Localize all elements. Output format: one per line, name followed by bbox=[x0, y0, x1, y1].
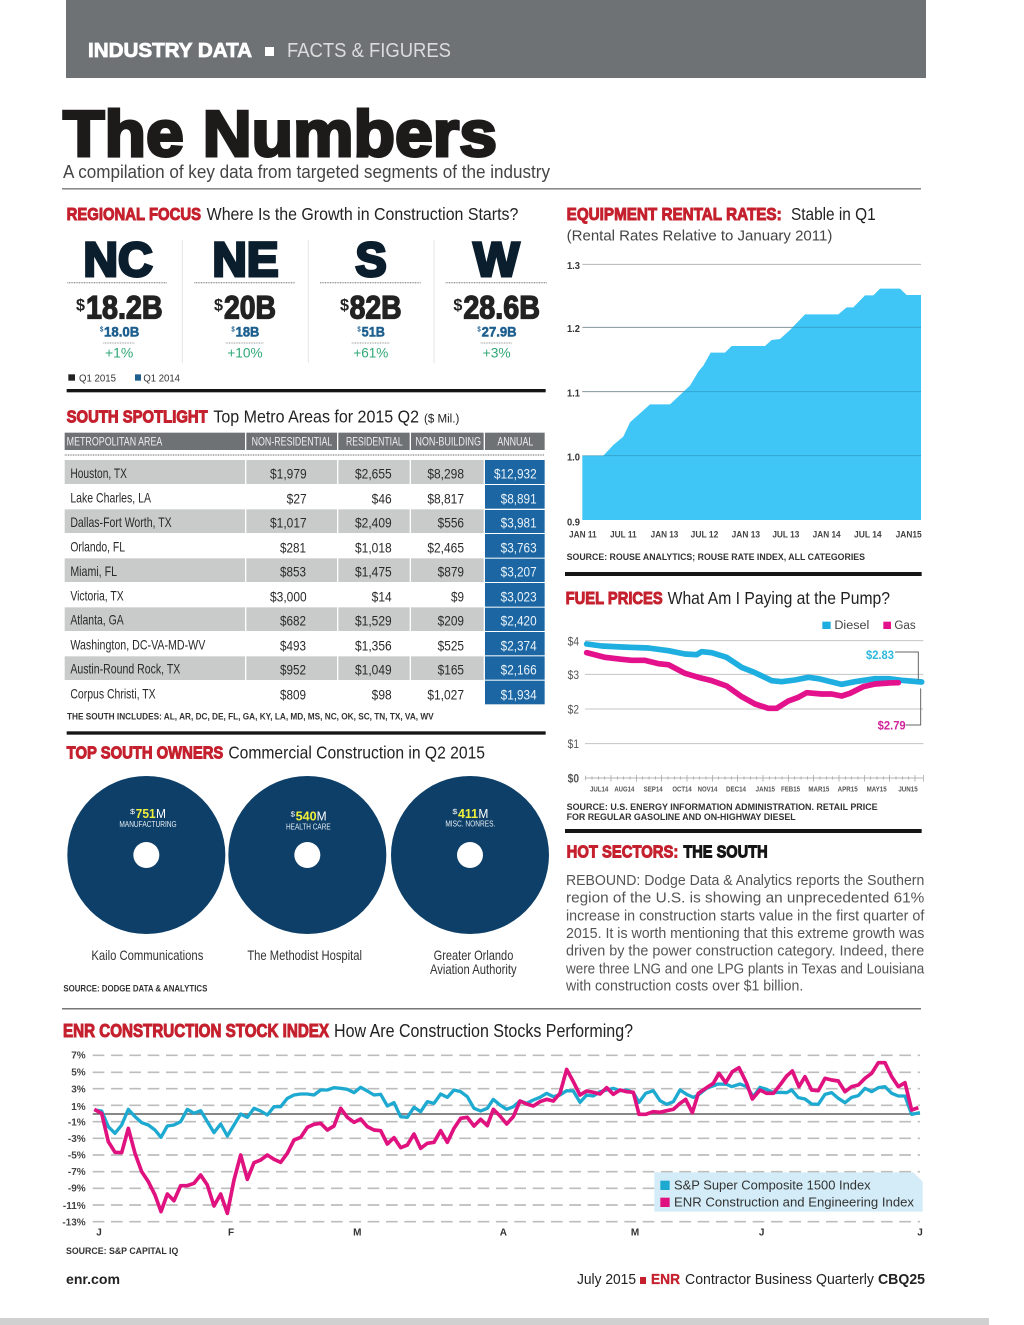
table row: Austin bbox=[70, 661, 537, 678]
area chart: rental rates: JAN 14 bbox=[813, 529, 841, 539]
line chart: stock index: M bbox=[353, 1228, 361, 1239]
heading: equipment rental rates: EQUIPMENT RENTAL RATES: bbox=[567, 204, 782, 224]
table row: Corpus Christi: $98 bbox=[372, 686, 392, 702]
region S: +61% bbox=[353, 345, 388, 361]
line chart: fuel prices: $3 bbox=[568, 668, 579, 682]
area chart: rental rates: 1.0 bbox=[567, 453, 580, 464]
line chart: fuel prices: JUN15 bbox=[898, 784, 918, 793]
body text: 2015. It is worth mentioning that this extreme growth was bbox=[566, 926, 924, 942]
region NE bbox=[194, 233, 295, 361]
disc: Kailo Communications: 751 bbox=[136, 806, 156, 821]
table row: Houston: Houston, TX bbox=[70, 465, 127, 481]
table row: Washington: Washington, DC-VA-MD-WV bbox=[70, 636, 206, 652]
heading: regional focus: REGIONAL FOCUS bbox=[67, 204, 201, 224]
table row: Victoria: $3,023 bbox=[501, 588, 537, 604]
table row: Dallas bbox=[70, 514, 537, 531]
region W: 28.6B bbox=[463, 289, 540, 325]
heading: south spotlight: ($ Mil.) bbox=[424, 412, 459, 426]
callout: gas price bbox=[878, 688, 921, 732]
line chart: fuel prices: $1 bbox=[568, 737, 579, 751]
body text bbox=[565, 873, 925, 995]
heading: equipment rental rates: (Rental Rates Relative to January 2011) bbox=[567, 228, 832, 245]
legend: quarters: Q1 2015 bbox=[79, 373, 116, 384]
heading: south spotlight bbox=[67, 407, 459, 427]
header band bbox=[66, 0, 926, 78]
line chart: fuel prices: AUG14 bbox=[614, 784, 635, 793]
body text: REBOUND: Dodge Data & Analytics reports the Southern bbox=[566, 873, 924, 889]
region NC: +1% bbox=[105, 345, 133, 361]
body text: increase in construction starts value in the first quarter of bbox=[566, 908, 925, 924]
heading: equipment rental rates bbox=[567, 204, 876, 245]
region NE: $ bbox=[214, 296, 224, 315]
heading: hot sectors bbox=[567, 842, 768, 862]
table row: Dallas: $2,409 bbox=[355, 515, 392, 531]
region NE: +10% bbox=[227, 345, 263, 361]
table row: Houston bbox=[70, 465, 537, 482]
table row: Washington: $525 bbox=[438, 637, 464, 653]
disc: The Methodist Hospital: 540 bbox=[296, 809, 317, 824]
disc: Kailo Communications: M bbox=[156, 806, 166, 821]
region W: 27.9B bbox=[482, 324, 517, 340]
body text: with construction costs over $1 billion. bbox=[565, 979, 803, 995]
table row: Dallas: Dallas-Fort Worth, TX bbox=[70, 514, 172, 530]
heading: top south owners: Commercial Construction in Q2 2015 bbox=[228, 742, 485, 762]
legend: fuel: Diesel bbox=[834, 618, 869, 632]
table row: Miami bbox=[70, 563, 537, 580]
table header: NON-BUILDING bbox=[415, 435, 481, 449]
region S: $ bbox=[357, 325, 361, 334]
footer: CBQ25 bbox=[878, 1271, 925, 1288]
line chart: stock index: 1% bbox=[71, 1102, 86, 1113]
heading: fuel prices: What Am I Paying at the Pump? bbox=[668, 588, 890, 608]
heading: fuel prices bbox=[566, 588, 890, 608]
table header bbox=[65, 433, 545, 450]
line chart: stock index: -7% bbox=[68, 1167, 86, 1178]
line chart: fuel prices: MAY15 bbox=[867, 784, 887, 793]
table row: Houston: $1,979 bbox=[270, 466, 307, 482]
region NC: NC bbox=[83, 233, 153, 287]
line chart: fuel prices: $4 bbox=[568, 635, 579, 649]
line chart: fuel prices: $0 bbox=[568, 771, 579, 785]
line chart: stock index: 3% bbox=[71, 1085, 86, 1096]
source: EIA: FOR REGULAR GASOLINE AND ON-HIGHWAY DIESEL bbox=[567, 812, 796, 822]
panel: top south owners bbox=[63, 731, 549, 994]
table row: Austin: $1,049 bbox=[355, 662, 392, 678]
callout: diesel price bbox=[866, 648, 918, 680]
line chart: stock index: J bbox=[917, 1228, 923, 1239]
line chart: fuel prices: FEB15 bbox=[781, 784, 800, 793]
legend: stock index: S&P Super Composite 1500 Index bbox=[674, 1179, 871, 1193]
panel: equipment rental rates bbox=[565, 204, 922, 576]
region W: +3% bbox=[483, 345, 511, 361]
subtitle: A compilation of key data from targeted segments of the industry bbox=[63, 162, 550, 182]
line chart: stock index: M bbox=[631, 1228, 639, 1239]
table row: Lake Charles bbox=[70, 490, 537, 506]
table header: NON-RESIDENTIAL bbox=[252, 435, 333, 449]
region NE: 20B bbox=[224, 289, 276, 325]
area chart: rental rates: 1.2 bbox=[567, 324, 580, 335]
line chart: fuel prices: JUL14 bbox=[590, 784, 609, 793]
region S: S bbox=[355, 233, 387, 287]
panel: hot sectors bbox=[565, 829, 925, 995]
source: rouse: SOURCE: ROUSE ANALYTICS; ROUSE RATE INDEX, ALL CATEGORIES bbox=[567, 552, 865, 562]
heading: ENR construction stock index: ENR CONSTRUCTION STOCK INDEX bbox=[63, 1021, 329, 1041]
disc: Greater Orlando Aviation Authority: MISC. NONRES. bbox=[445, 819, 495, 829]
legend: fuel bbox=[822, 618, 916, 632]
table row: Atlanta: $209 bbox=[438, 613, 464, 629]
line chart: stock index: 7% bbox=[71, 1051, 86, 1062]
table row: Corpus Christi: $1,934 bbox=[501, 686, 537, 702]
heading: hot sectors: THE SOUTH bbox=[683, 842, 768, 862]
region W bbox=[446, 233, 547, 361]
line chart: stock index: -13% bbox=[62, 1218, 86, 1229]
region S: $ bbox=[340, 296, 350, 315]
table row: Dallas: $3,981 bbox=[501, 515, 537, 531]
table row: Orlando: $281 bbox=[280, 539, 306, 555]
legend: stock index: ENR Construction and Engineering Index bbox=[674, 1196, 915, 1210]
area chart: rental rates: 0.9 bbox=[567, 518, 580, 529]
body text: were three LNG and one LPG plants in Texas and Louisiana bbox=[565, 961, 925, 977]
legend: stock index bbox=[654, 1172, 923, 1212]
owner names: The Methodist Hospital bbox=[247, 947, 362, 963]
disc: The Methodist Hospital: HEALTH CARE bbox=[286, 821, 331, 831]
table row: Atlanta bbox=[70, 612, 537, 629]
owner names: Greater Orlando bbox=[434, 947, 514, 963]
area chart: rental rates: 1.3 bbox=[567, 261, 580, 272]
header band: FACTS & FIGURES bbox=[287, 40, 451, 62]
line chart: fuel prices: MAR15 bbox=[808, 784, 829, 793]
heading: ENR construction stock index: How Are Construction Stocks Performing? bbox=[334, 1021, 633, 1041]
table header: ANNUAL bbox=[497, 435, 534, 449]
table row: Lake Charles: $8,891 bbox=[501, 490, 537, 506]
header band: INDUSTRY DATA bbox=[88, 40, 252, 62]
legend: quarters: Q1 2014 bbox=[143, 373, 180, 384]
table row: Atlanta: Atlanta, GA bbox=[70, 612, 124, 628]
disc: Kailo Communications bbox=[67, 776, 225, 934]
table row: Washington bbox=[70, 636, 537, 653]
line chart: fuel prices: $2 bbox=[568, 702, 579, 716]
table row: Houston: $2,655 bbox=[355, 466, 392, 482]
heading: top south owners bbox=[67, 742, 485, 762]
heading: top south owners: TOP SOUTH OWNERS bbox=[67, 742, 223, 762]
area chart: rental rates: JUL 14 bbox=[854, 529, 882, 539]
disc: The Methodist Hospital bbox=[228, 776, 386, 934]
table row: Houston: $8,298 bbox=[427, 466, 464, 482]
region NC: $ bbox=[76, 296, 86, 315]
region NC: 18.2B bbox=[86, 289, 163, 325]
heading: regional focus bbox=[67, 204, 518, 224]
line chart: stock index: A bbox=[500, 1228, 507, 1239]
callout: diesel price: $2.83 bbox=[866, 648, 894, 662]
annual column bbox=[485, 460, 545, 704]
table row: Washington: $493 bbox=[280, 637, 306, 653]
heading: hot sectors: HOT SECTORS: bbox=[567, 842, 678, 862]
area chart: rental rates bbox=[567, 261, 922, 539]
table row: Atlanta: $2,420 bbox=[501, 613, 537, 629]
table header: RESIDENTIAL bbox=[346, 435, 403, 449]
line chart: fuel prices: JAN15 bbox=[756, 784, 775, 793]
title: The Numbers bbox=[63, 97, 497, 170]
line chart: fuel prices: DEC14 bbox=[726, 784, 747, 793]
table row: Houston: $12,932 bbox=[494, 466, 537, 482]
table row: Victoria: $9 bbox=[451, 588, 464, 604]
table row: Dallas: $556 bbox=[438, 515, 464, 531]
source: EIA: SOURCE: U.S. ENERGY INFORMATION ADMINISTRATION. RETAIL PRICE bbox=[567, 802, 878, 812]
table row: Orlando: Orlando, FL bbox=[70, 539, 125, 555]
table row: Miami: $1,475 bbox=[355, 564, 392, 580]
table row: Orlando: $1,018 bbox=[355, 539, 392, 555]
line chart: stock index: -1% bbox=[68, 1117, 86, 1128]
owner names bbox=[91, 947, 517, 977]
table row: Corpus Christi: $1,027 bbox=[427, 686, 464, 702]
disc: The Methodist Hospital: $ bbox=[291, 810, 295, 819]
line chart: fuel prices: SEP14 bbox=[644, 784, 663, 793]
area chart: rental rates: JAN15 bbox=[896, 529, 922, 539]
region W: W bbox=[473, 233, 519, 287]
table row: Atlanta: $1,529 bbox=[355, 613, 392, 629]
line chart: fuel prices bbox=[568, 635, 923, 793]
line chart: fuel prices: APR15 bbox=[838, 784, 858, 793]
disc: Kailo Communications: MANUFACTURING bbox=[119, 819, 177, 829]
area chart: rental rates: JAN 13 bbox=[651, 529, 678, 539]
area chart: rental rates: JAN 11 bbox=[569, 529, 597, 539]
heading: equipment rental rates: Stable in Q1 bbox=[791, 204, 876, 224]
table row: Corpus Christi bbox=[70, 685, 537, 702]
area chart: rental rates: JUL 13 bbox=[772, 529, 799, 539]
table row: Victoria: $14 bbox=[372, 588, 392, 604]
table row: Orlando bbox=[70, 539, 537, 555]
table row: Atlanta: $682 bbox=[280, 613, 306, 629]
region NC: 18.0B bbox=[104, 324, 139, 340]
legend: quarters bbox=[68, 373, 180, 384]
region NE: $ bbox=[231, 325, 235, 334]
legend: fuel: Gas bbox=[894, 618, 916, 632]
callout: gas price: $2.79 bbox=[878, 718, 906, 732]
table row: Victoria bbox=[70, 587, 537, 604]
panel: regional focus bbox=[67, 204, 547, 427]
body text: region of the U.S. is showing an unprecedented 61% bbox=[566, 891, 924, 907]
area chart: rental rates: JUL 11 bbox=[610, 529, 637, 539]
line chart: fuel prices: NOV14 bbox=[698, 784, 718, 793]
source: EIA bbox=[567, 802, 878, 822]
disc: Greater Orlando Aviation Authority bbox=[391, 776, 549, 934]
region NC: $ bbox=[100, 325, 103, 334]
region W: $ bbox=[453, 296, 463, 315]
heading: regional focus: Where Is the Growth in Construction Starts? bbox=[207, 204, 518, 224]
line chart: stock index: 5% bbox=[71, 1068, 86, 1079]
region W: $ bbox=[477, 325, 481, 334]
table row: Washington: $1,356 bbox=[355, 637, 392, 653]
heading: ENR construction stock index bbox=[63, 1021, 633, 1041]
table row: Orlando: $3,763 bbox=[501, 539, 537, 555]
region S bbox=[320, 233, 421, 361]
table row: Victoria: Victoria, TX bbox=[70, 587, 124, 603]
table header: METROPOLITAN AREA bbox=[67, 435, 162, 449]
disc: Greater Orlando Aviation Authority: M bbox=[478, 806, 488, 821]
table row: Dallas: $1,017 bbox=[270, 515, 307, 531]
line chart: stock index: -11% bbox=[63, 1201, 86, 1212]
footer: enr.com bbox=[66, 1271, 120, 1287]
table row: Corpus Christi: Corpus Christi, TX bbox=[70, 685, 156, 701]
region NE: 18B bbox=[236, 324, 259, 340]
region S: 51B bbox=[362, 324, 385, 340]
table row: Lake Charles: $46 bbox=[372, 490, 392, 506]
panel: fuel prices bbox=[566, 588, 923, 822]
table note: THE SOUTH INCLUDES: AL, AR, DC, DE, FL, GA, KY, LA, MD, MS, NC, OK, SC, TN, TX, VA, WV bbox=[67, 711, 434, 721]
line chart: stock index: F bbox=[228, 1228, 234, 1239]
line chart: fuel prices: OCT14 bbox=[672, 784, 692, 793]
disc: Kailo Communications: $ bbox=[130, 807, 135, 816]
source: S&P: SOURCE: S&P CAPITAL IQ bbox=[66, 1246, 178, 1256]
source: dodge: SOURCE: DODGE DATA & ANALYTICS bbox=[63, 984, 207, 994]
table row: Washington: $2,374 bbox=[501, 637, 537, 653]
area chart: rental rates: JUL 12 bbox=[691, 529, 718, 539]
table row: Orlando: $2,465 bbox=[427, 539, 464, 555]
table row: Miami: $853 bbox=[280, 564, 306, 580]
table row: Miami: Miami, FL bbox=[70, 563, 117, 579]
table row: Austin: Austin-Round Rock, TX bbox=[70, 661, 181, 677]
table: top metro areas bbox=[65, 433, 545, 721]
region NC bbox=[67, 233, 167, 361]
table row: Lake Charles: Lake Charles, LA bbox=[70, 490, 151, 506]
heading: fuel prices: FUEL PRICES bbox=[566, 588, 663, 608]
disc: Greater Orlando Aviation Authority: 411 bbox=[458, 806, 479, 821]
heading: south spotlight: Top Metro Areas for 2015 Q2 bbox=[213, 407, 419, 427]
line chart: stock index: -3% bbox=[68, 1134, 86, 1145]
region NE: NE bbox=[212, 233, 279, 287]
footer: Contractor Business Quarterly bbox=[685, 1271, 874, 1288]
disc: Greater Orlando Aviation Authority: $ bbox=[452, 807, 457, 816]
table row: Austin: $952 bbox=[280, 662, 306, 678]
line chart: stock index: -5% bbox=[68, 1151, 86, 1162]
table row: Austin: $2,166 bbox=[501, 662, 537, 678]
owner names: Aviation Authority bbox=[430, 961, 517, 977]
table row: Corpus Christi: $809 bbox=[280, 686, 306, 702]
heading: south spotlight: SOUTH SPOTLIGHT bbox=[67, 407, 208, 427]
disc: The Methodist Hospital: M bbox=[317, 809, 327, 824]
table row: Victoria: $3,000 bbox=[270, 588, 307, 604]
line chart: stock index: J bbox=[759, 1228, 764, 1239]
owner names: Kailo Communications bbox=[91, 947, 203, 963]
area chart: rental rates: 1.1 bbox=[567, 389, 580, 400]
line chart: stock index: J bbox=[96, 1228, 102, 1239]
footer bbox=[66, 1271, 925, 1288]
table row: Miami: $879 bbox=[438, 564, 464, 580]
footer: July 2015 bbox=[577, 1271, 636, 1288]
table row: Miami: $3,207 bbox=[501, 564, 537, 580]
line chart: stock index bbox=[62, 1051, 923, 1256]
region S: 82B bbox=[350, 289, 402, 325]
footer: ENR bbox=[651, 1271, 680, 1288]
table row: Austin: $165 bbox=[438, 662, 464, 678]
body text: driven by the power construction category. Indeed, there bbox=[566, 944, 924, 960]
line chart: stock index: -9% bbox=[68, 1184, 86, 1195]
table row: Lake Charles: $8,817 bbox=[427, 490, 464, 506]
area chart: rental rates: JAN 13 bbox=[732, 529, 760, 539]
table row: Lake Charles: $27 bbox=[287, 490, 307, 506]
